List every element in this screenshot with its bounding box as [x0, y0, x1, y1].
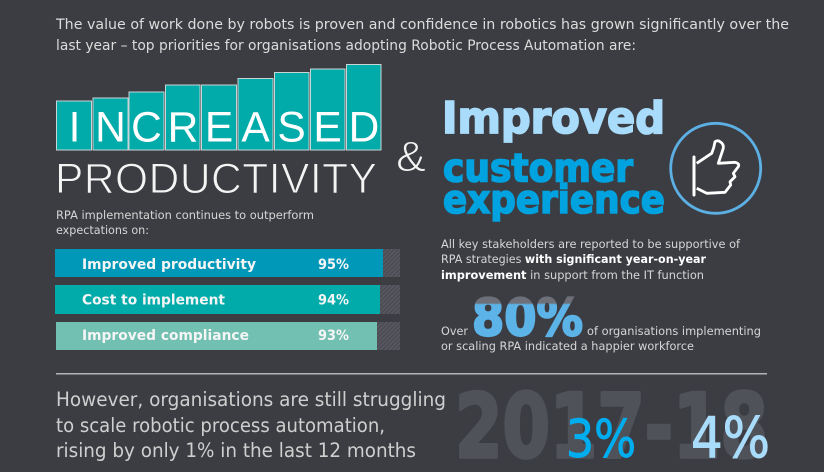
- text: struggling to scale: to scale robotic process automation,: [56, 414, 385, 437]
- text: struggling to scale: rising by only 1% in the last 12 months: [56, 439, 416, 462]
- bar: cost to implement 94%: [55, 285, 400, 314]
- text: stakeholders support: [441, 237, 741, 282]
- text: stakeholders support: RPA strategies with significant year-on-year: [441, 252, 706, 266]
- word: INCREASED: D: [349, 105, 379, 152]
- bar: improved compliance 93%: Improved compliance: [82, 328, 249, 344]
- text: stakeholders support: improvement in support from the IT function: [441, 268, 704, 282]
- heading: improved customer experience: customer: [443, 146, 634, 192]
- word: PRODUCTIVITY: PRODUCTIVITY: [55, 156, 377, 203]
- bar: improved productivity 95%: Improved productivity: [82, 257, 257, 273]
- word: INCREASED: E: [205, 105, 233, 152]
- bar chart: expectations: [55, 249, 400, 350]
- bar: improved compliance 93%: [56, 322, 400, 350]
- intro text: [55, 17, 789, 54]
- value: 3%: 3%: [566, 410, 636, 470]
- heading: improved customer experience: experience: [443, 178, 665, 223]
- callout: 80% happier workforce: of organisations implementing: [587, 324, 761, 338]
- callout: 80% happier workforce: or scaling RPA indicated a happier workforce: [441, 339, 694, 353]
- stat: 2017-18 with 3% and 4%: [455, 375, 770, 472]
- icon: thumbs up: [671, 123, 761, 213]
- callout: 80% happier workforce: Over: [441, 324, 468, 338]
- word: INCREASED: E: [313, 105, 342, 152]
- heading: improved customer experience: Improved: [442, 93, 665, 144]
- rising bars behind INCREASED: [56, 64, 381, 150]
- bar: improved compliance 93%: 93%: [318, 328, 349, 344]
- text: RPA implementation intro: RPA implementation continues to outperform: [56, 208, 314, 222]
- bar: improved productivity 95%: [55, 249, 400, 277]
- intro text: The value of work done by robots is proven and confidence in robotics has grown significantly over the: [55, 17, 789, 33]
- text: RPA implementation intro: [56, 208, 314, 237]
- word: INCREASED: A: [241, 105, 270, 152]
- intro text: last year – top priorities for organisations adopting Robotic Process Automation are:: [56, 38, 636, 54]
- text: RPA implementation intro: expectations on:: [56, 223, 149, 237]
- word: INCREASED: S: [277, 105, 306, 152]
- word: INCREASED: C: [131, 105, 162, 152]
- word: INCREASED: [69, 105, 379, 152]
- bar: cost to implement 94%: 94%: [318, 292, 349, 308]
- word: INCREASED: N: [95, 105, 126, 152]
- callout: 80% happier workforce: 80%: [472, 290, 583, 348]
- text: stakeholders support: All key stakeholders are reported to be supportive of: [441, 237, 741, 251]
- word: INCREASED: I: [69, 105, 80, 152]
- heading: increased productivity: [55, 64, 381, 203]
- bar: cost to implement 94%: Cost to implement: [82, 292, 225, 308]
- bar: improved productivity 95%: 95%: [318, 257, 349, 273]
- word: INCREASED: R: [168, 105, 198, 152]
- text: struggling to scale: [56, 388, 446, 462]
- callout: 80% happier workforce: [441, 290, 761, 353]
- ampersand: &: [396, 133, 426, 181]
- value: 4%: 4%: [691, 406, 770, 471]
- text: struggling to scale: However, organisations are still struggling: [56, 388, 446, 411]
- heading: improved customer experience: [442, 93, 665, 223]
